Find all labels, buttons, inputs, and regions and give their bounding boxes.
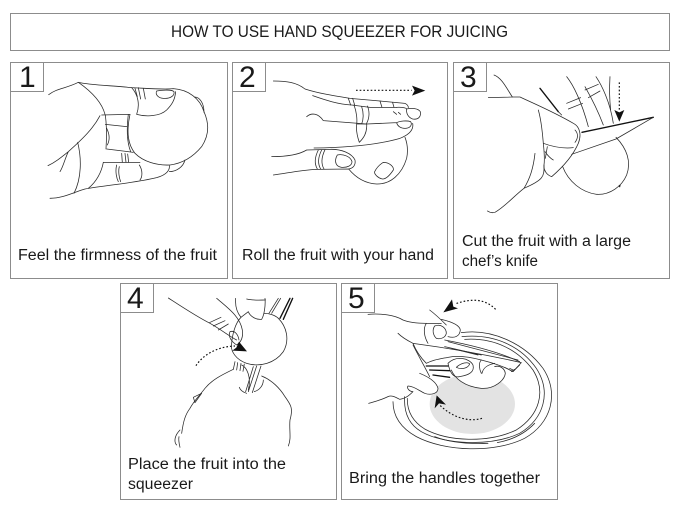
panel: step 4	[120, 282, 336, 500]
caption: Cut the fruit with a large	[462, 233, 631, 250]
illustration: hand feeling fruit	[48, 82, 208, 198]
step number 4	[120, 282, 154, 315]
illustration: hand rolling fruit	[272, 81, 425, 184]
step number 3	[454, 61, 486, 94]
step number 1: 1	[19, 61, 36, 94]
illustration: cutting fruit with knife	[487, 75, 653, 213]
step number 1	[10, 61, 44, 94]
title: HOW TO USE HAND SQUEEZER FOR JUICING	[171, 23, 508, 41]
step number 2: 2	[239, 61, 256, 94]
panel: step 1	[10, 61, 228, 278]
step number 4: 4	[127, 282, 144, 315]
caption: Place the fruit into the	[128, 456, 286, 473]
caption: Feel the firmness of the fruit	[18, 247, 218, 264]
step number 3: 3	[460, 61, 477, 94]
title	[10, 14, 670, 50]
panel: step 3	[454, 61, 670, 278]
panel: step 2	[232, 61, 448, 278]
caption: Roll the fruit with your hand	[242, 247, 434, 264]
panel: step 3: chef’s knife	[462, 253, 538, 270]
step number 5	[342, 282, 374, 315]
caption: Bring the handles together	[349, 470, 540, 487]
panel: step 4: squeezer	[128, 476, 193, 493]
illustration: placing fruit into squeezer	[168, 298, 293, 447]
step number 5: 5	[348, 282, 365, 315]
illustration: squeezing juice over plate	[368, 299, 552, 449]
step number 2	[232, 61, 266, 94]
panel: step 5	[342, 282, 558, 500]
